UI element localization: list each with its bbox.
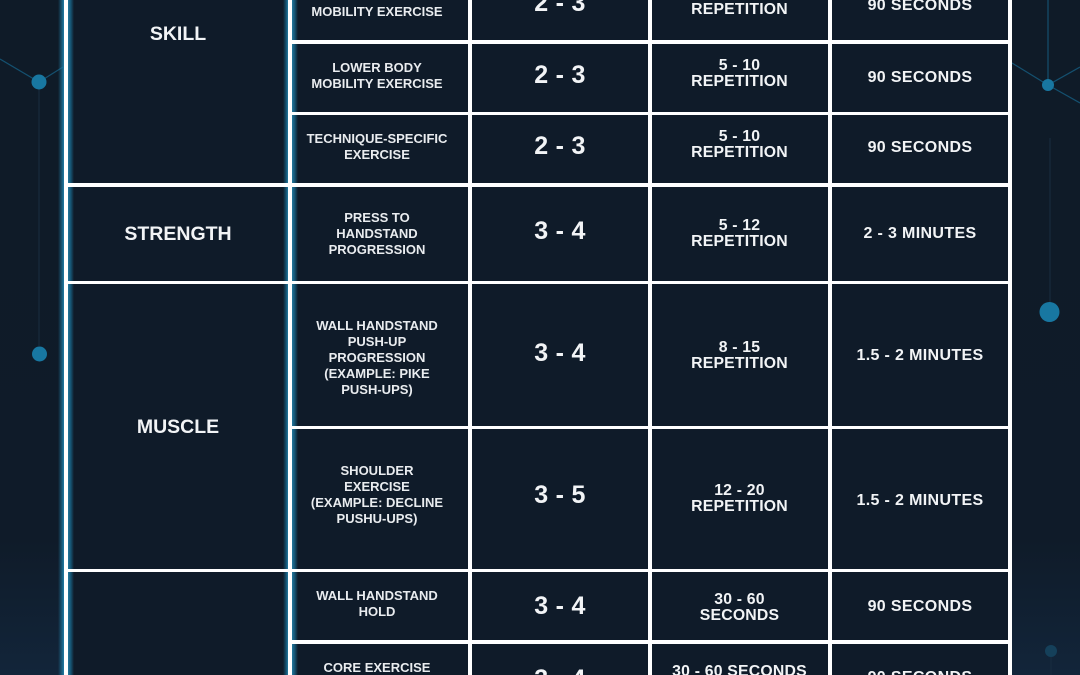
row 4 exercise: HANDSTAND — [336, 226, 418, 241]
row 7 sets: 3 - 4 — [534, 592, 586, 620]
category: skill — [68, 0, 288, 183]
row 7 sets — [472, 572, 648, 640]
row 4 exercise — [292, 187, 468, 281]
category: skill: SKILL — [150, 23, 206, 45]
row 1 sets — [472, 0, 648, 40]
row 5 reps: REPETITION — [691, 355, 788, 372]
category: strength — [68, 187, 288, 281]
row 2 reps: 5 - 10 — [719, 57, 760, 74]
row 7 rest: 90 SECONDS — [868, 598, 972, 615]
row 7 reps: SECONDS — [700, 607, 779, 624]
row 6 reps: 12 - 20 — [714, 482, 765, 499]
row 6 rest: 1.5 - 2 MINUTES — [856, 492, 984, 508]
row 6 exercise: (EXAMPLE: DECLINE — [311, 494, 443, 510]
row 7 exercise: HOLD — [359, 604, 395, 619]
category: strength: STRENGTH — [124, 223, 232, 245]
row 6 rest — [832, 429, 1008, 569]
category: muscle: MUSCLE — [137, 416, 219, 438]
row 6 exercise: PUSHU-UPS) — [337, 510, 417, 526]
row 3 reps — [652, 115, 828, 183]
row 5 sets: 3 - 4 — [534, 338, 586, 366]
row 4 rest — [832, 187, 1008, 281]
row 4 exercise: PRESS TO — [344, 210, 410, 225]
row 4 reps: 5 - 12 — [719, 216, 760, 234]
row 5 rest — [832, 284, 1008, 426]
row 6 sets — [472, 429, 648, 569]
row 3 reps: 5 - 10 — [719, 128, 760, 145]
row 6 reps: REPETITION — [691, 498, 788, 515]
row 4 sets — [472, 187, 648, 281]
row 1 reps: REPETITION — [691, 0, 788, 18]
row 5 reps: 8 - 15 — [719, 339, 760, 356]
row 2 sets — [472, 44, 648, 112]
row 3 rest: 90 SECONDS — [868, 139, 972, 156]
row 3 rest — [832, 115, 1008, 183]
row 8 rest — [832, 644, 1008, 675]
row 7 exercise — [292, 572, 468, 640]
row 5 rest: 1.5 - 2 MINUTES — [856, 346, 984, 364]
row 5 exercise — [292, 284, 468, 426]
row 2 exercise: MOBILITY EXERCISE — [311, 76, 443, 91]
row 1 exercise — [292, 0, 468, 40]
row 5 reps — [652, 284, 828, 426]
row 5 exercise: PROGRESSION — [329, 350, 425, 364]
row 1 reps — [652, 0, 828, 40]
row 6 exercise — [292, 429, 468, 569]
row 7 reps: 30 - 60 — [714, 591, 765, 608]
row 8 sets — [472, 644, 648, 675]
row 3 sets: 2 - 3 — [534, 132, 586, 160]
row 8 reps — [652, 644, 828, 675]
row 4 exercise: PROGRESSION — [329, 242, 425, 257]
row 3 exercise — [292, 115, 468, 183]
row 2 exercise: LOWER BODY — [332, 60, 422, 75]
row 7 reps — [652, 572, 828, 640]
row 5 exercise: PUSH-UP — [348, 334, 406, 348]
row 3 reps: REPETITION — [691, 144, 788, 161]
row 7 rest — [832, 572, 1008, 640]
row 2 reps — [652, 44, 828, 112]
row 6 exercise: EXERCISE — [344, 478, 410, 494]
row 2 exercise — [292, 44, 468, 112]
row 3 exercise: EXERCISE — [344, 147, 410, 162]
row 5 exercise: PUSH-UPS) — [341, 382, 413, 396]
row 6 reps — [652, 429, 828, 569]
row 4 reps: REPETITION — [691, 232, 788, 250]
category: bottom group — [68, 572, 288, 675]
row 3 exercise: TECHNIQUE-SPECIFIC — [307, 131, 447, 146]
row 2 sets: 2 - 3 — [534, 60, 586, 88]
row 2 rest: 90 SECONDS — [868, 69, 972, 86]
row 7 exercise: WALL HANDSTAND — [316, 588, 438, 603]
category: muscle — [68, 284, 288, 569]
row 2 reps: REPETITION — [691, 73, 788, 90]
row 8 exercise: CORE EXERCISE — [324, 660, 430, 675]
row 6 exercise: SHOULDER — [341, 462, 413, 478]
row 1 exercise: MOBILITY EXERCISE — [311, 4, 443, 19]
row 4 reps — [652, 187, 828, 281]
row 3 sets — [472, 115, 648, 183]
row 6 sets: 3 - 5 — [534, 480, 586, 508]
row 2 rest — [832, 44, 1008, 112]
row 8 exercise — [292, 644, 468, 675]
row 5 sets — [472, 284, 648, 426]
row 1 rest — [832, 0, 1008, 40]
row 4 sets: 3 - 4 — [534, 217, 586, 245]
row 4 rest: 2 - 3 MINUTES — [863, 225, 976, 242]
row 5 exercise: (EXAMPLE: PIKE — [324, 366, 430, 380]
row 5 exercise: WALL HANDSTAND — [316, 318, 438, 332]
